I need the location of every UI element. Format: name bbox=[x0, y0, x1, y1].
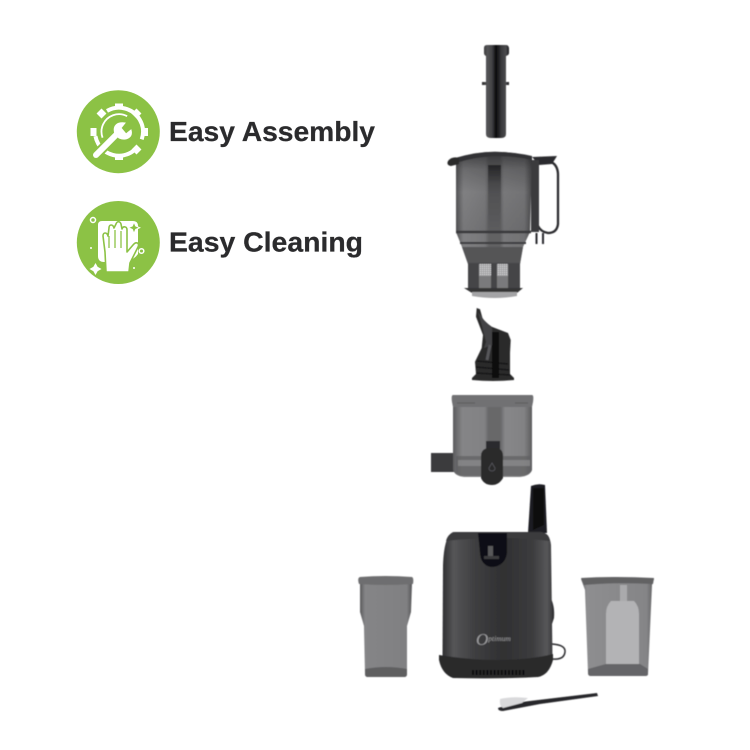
label: Easy Assembly: Easy Assembly bbox=[169, 116, 375, 147]
cleaning brush bbox=[498, 693, 598, 711]
feed chute jug with filter bbox=[447, 152, 558, 298]
plunger bbox=[482, 45, 509, 138]
icon: hand wiping with cloth bbox=[77, 201, 160, 284]
label: Easy Cleaning: Easy Cleaning bbox=[169, 226, 363, 258]
juicing bowl bbox=[431, 395, 533, 485]
icon: gear and wrench bbox=[77, 90, 160, 173]
motor base bbox=[439, 484, 565, 678]
auger bbox=[472, 308, 514, 381]
logo: Optimum: ptimum bbox=[487, 634, 511, 643]
juicer parts bbox=[358, 45, 654, 711]
tall juice cup bbox=[358, 576, 413, 677]
feature: easy cleaning bbox=[77, 201, 363, 284]
feature: easy assembly bbox=[77, 90, 375, 173]
pulp container with cleaning bottle bbox=[581, 577, 654, 676]
logo: Optimum: O bbox=[476, 630, 488, 649]
